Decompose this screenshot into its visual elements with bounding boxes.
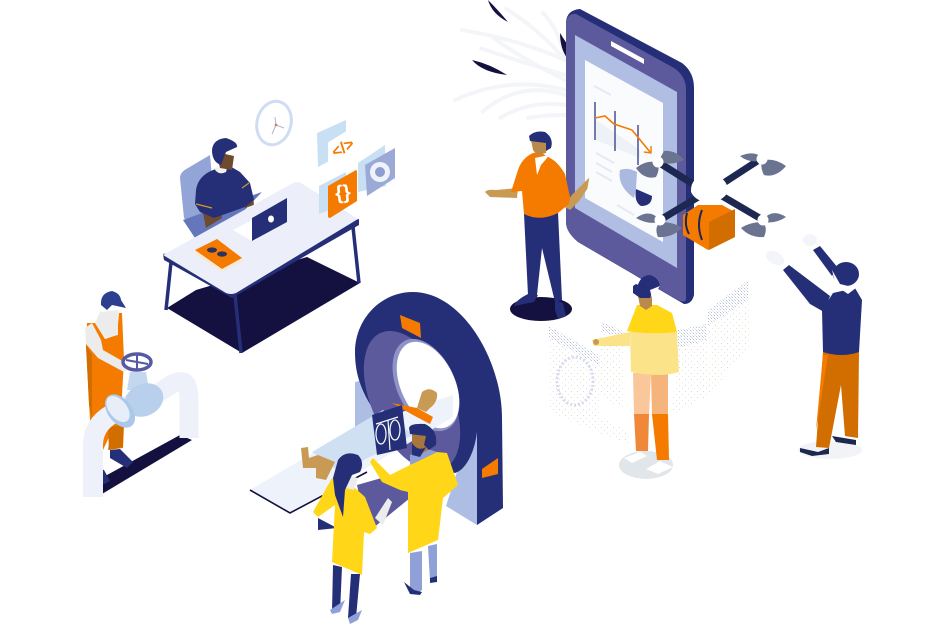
MRI scanner xyxy=(250,292,503,533)
settings tile xyxy=(358,145,395,196)
drone arms xyxy=(658,158,763,220)
bore opening xyxy=(384,332,472,438)
braces tile: {} xyxy=(334,181,352,205)
pipe xyxy=(93,372,189,497)
inner ring xyxy=(344,316,480,486)
notebook xyxy=(195,239,243,272)
desk scene xyxy=(163,138,360,353)
rotors xyxy=(636,151,684,178)
plant behind phone xyxy=(455,0,567,118)
female doctor xyxy=(313,453,392,624)
hologram panels xyxy=(549,280,750,444)
presenter xyxy=(485,132,587,321)
code tile: </> xyxy=(329,136,357,161)
drone xyxy=(636,151,786,250)
bed xyxy=(250,395,453,513)
phone xyxy=(566,9,694,304)
bed base xyxy=(357,470,410,533)
floating tiles xyxy=(317,120,395,218)
laptop xyxy=(233,198,287,241)
worker and pipe valve xyxy=(85,291,192,497)
drone body xyxy=(691,175,728,202)
male doctor xyxy=(370,424,458,595)
developer xyxy=(195,138,254,228)
VR user xyxy=(592,275,679,479)
phone document with chart xyxy=(585,60,663,242)
arch xyxy=(355,292,503,525)
orange labels xyxy=(400,315,421,338)
wall clock xyxy=(252,98,296,148)
patient xyxy=(301,389,437,480)
parcel xyxy=(683,205,735,250)
x-ray sheet xyxy=(372,405,407,455)
rear housing xyxy=(355,375,385,427)
person with raised hands xyxy=(763,234,862,459)
worker xyxy=(85,291,151,484)
